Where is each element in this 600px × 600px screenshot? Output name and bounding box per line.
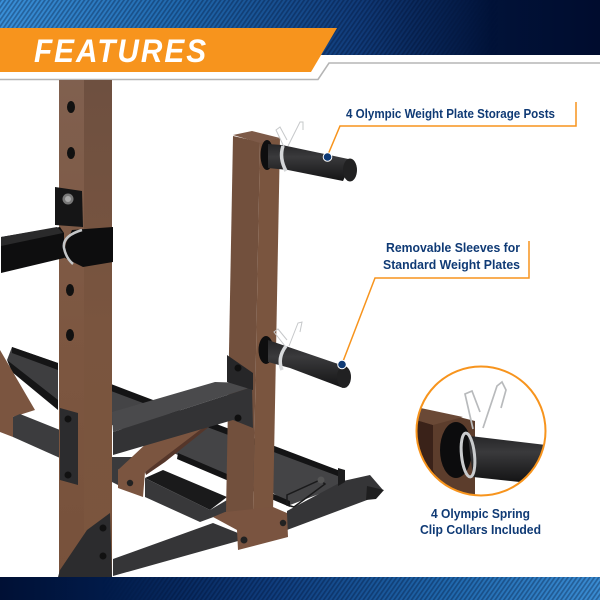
brown foot plate [213, 507, 288, 550]
upper bracket and crossbar [1, 187, 113, 273]
rear base beam [13, 414, 60, 458]
lower storage post [258, 322, 351, 388]
left post plate with bolts [60, 408, 78, 485]
front base beam [113, 468, 384, 576]
callout: storage posts [323, 102, 576, 161]
bottom gusset with bolts [58, 513, 112, 577]
short base beam behind brace [112, 457, 135, 485]
title: features [0, 28, 337, 72]
storage arm [112, 355, 253, 455]
footer banner [0, 577, 600, 600]
brown rear gusset [0, 350, 35, 437]
callout: removable sleeves [338, 240, 529, 369]
marker dot [323, 153, 332, 161]
marker dot [338, 360, 346, 369]
centre base beam [145, 470, 227, 522]
inset circle: spring clip collar [416, 366, 546, 496]
right post [226, 131, 280, 512]
title: features: FEATURES [34, 33, 206, 69]
callout: storage posts: 4 Olympic Weight Plate Storage Posts [346, 106, 555, 121]
storage tray [7, 347, 343, 507]
caption: spring clip collars: Clip Collars Included [420, 522, 541, 537]
product photo: power rack with weight storage [0, 80, 384, 577]
caption: spring clip collars [420, 506, 541, 537]
caption: spring clip collars: 4 Olympic Spring [431, 506, 530, 521]
callout: removable sleeves: Standard Weight Plates [383, 257, 520, 272]
upper storage post [260, 122, 357, 182]
left post [59, 80, 112, 577]
header banner [0, 0, 600, 80]
brown diagonal brace [118, 422, 215, 497]
callout: removable sleeves: Removable Sleeves for [386, 240, 520, 255]
